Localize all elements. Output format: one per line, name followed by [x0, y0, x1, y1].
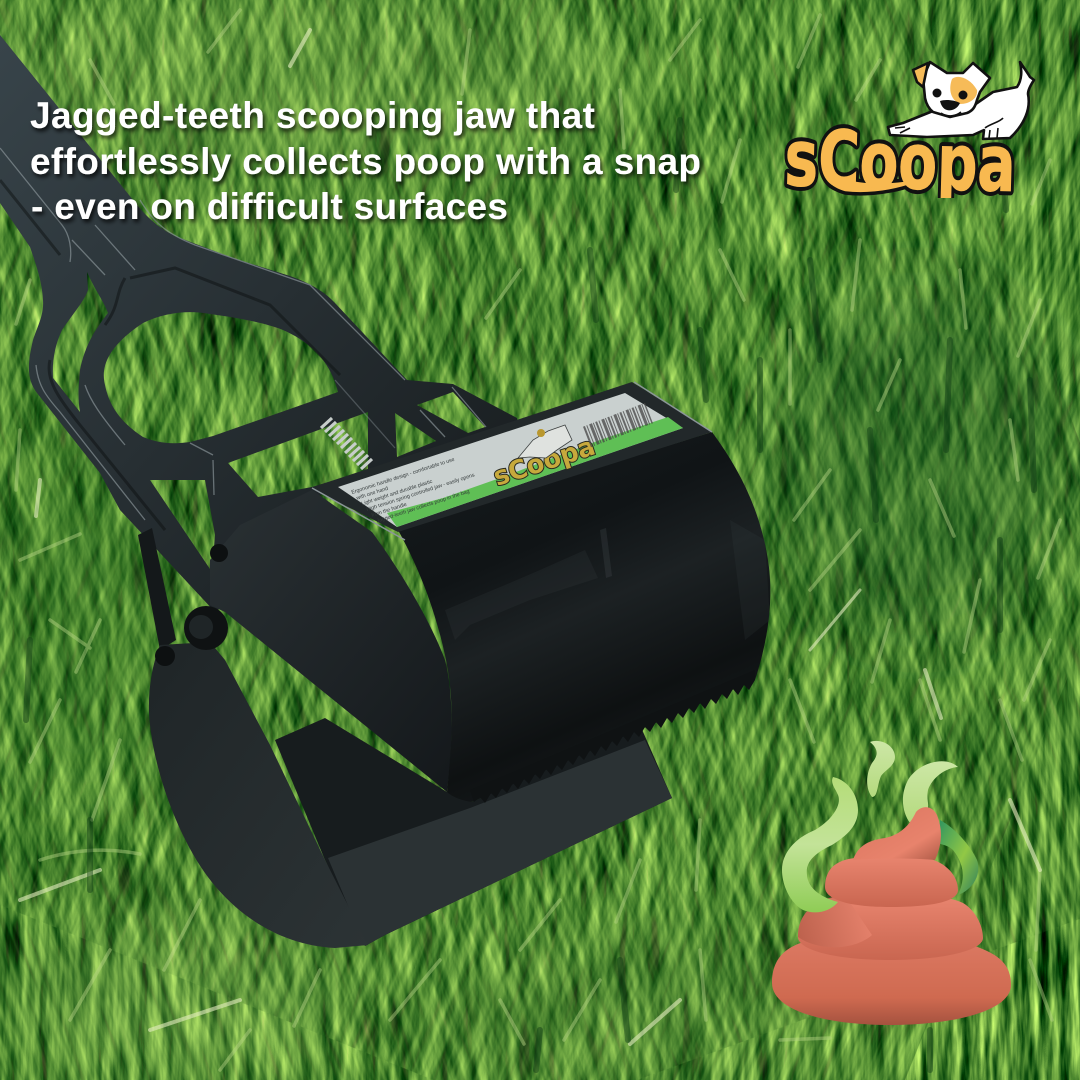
- poop base: [772, 934, 1011, 1025]
- pan: floor and back wall: [275, 718, 672, 946]
- stink wisp left: [782, 777, 858, 912]
- dog body: [888, 62, 1034, 139]
- label copy: Ergonomic handle design - comfortable to use: [351, 457, 455, 496]
- product: pooper scooper: [0, 35, 770, 948]
- dog ear: [913, 63, 928, 87]
- label logo: sCoopa: [490, 432, 599, 493]
- stink wisp small: [867, 741, 895, 797]
- body gloss: [445, 520, 770, 640]
- label copy: High tension spring controlled jaw - easily opens: [366, 472, 476, 513]
- label copy: Jagged-teeth jaw collects poop in the bag: [376, 489, 470, 525]
- heading: Jagged-teeth scooping jaw that: [30, 95, 595, 136]
- poop tip: [853, 807, 941, 860]
- lower rail stem: [138, 528, 176, 650]
- poop third tier: [798, 893, 983, 960]
- pivot bolts: [155, 544, 228, 666]
- teeth: [470, 670, 755, 803]
- side panel of jaw: [210, 490, 452, 792]
- label copy: [351, 452, 480, 529]
- barcode: [587, 413, 649, 437]
- label copy: with one hand: [356, 486, 389, 502]
- dog head: [923, 62, 990, 117]
- rib highlights: [0, 148, 486, 520]
- poop second tier: [825, 854, 958, 907]
- label sticker: [338, 393, 683, 529]
- top plate: [310, 382, 712, 532]
- pan side plate: [149, 642, 368, 948]
- heading: [30, 95, 701, 227]
- dog nose: [940, 100, 960, 110]
- logo: Scoopa: [784, 62, 1034, 210]
- icon: dog: [888, 62, 1034, 139]
- spring: [321, 418, 372, 469]
- icon: poop with stink: [772, 741, 1011, 1025]
- heading: effortlessly collects poop with a snap: [30, 141, 701, 182]
- poop tier shadow: [798, 895, 872, 947]
- jaw body: [398, 432, 770, 802]
- label copy: Light weight and durable plastic: [361, 479, 434, 507]
- logo wordmark: [784, 124, 1014, 198]
- pan floor: [328, 740, 672, 946]
- dog eyes: [932, 88, 968, 100]
- heading: - even on difficult surfaces: [31, 186, 508, 227]
- stink wisp right upper: [903, 761, 958, 823]
- dog patch: [950, 77, 977, 104]
- stink wisp right lower: [938, 820, 978, 895]
- wordmark swoosh: [832, 178, 906, 196]
- handle and frame: [0, 35, 522, 612]
- label copy: from the handle: [371, 502, 408, 519]
- label dog: [518, 425, 572, 458]
